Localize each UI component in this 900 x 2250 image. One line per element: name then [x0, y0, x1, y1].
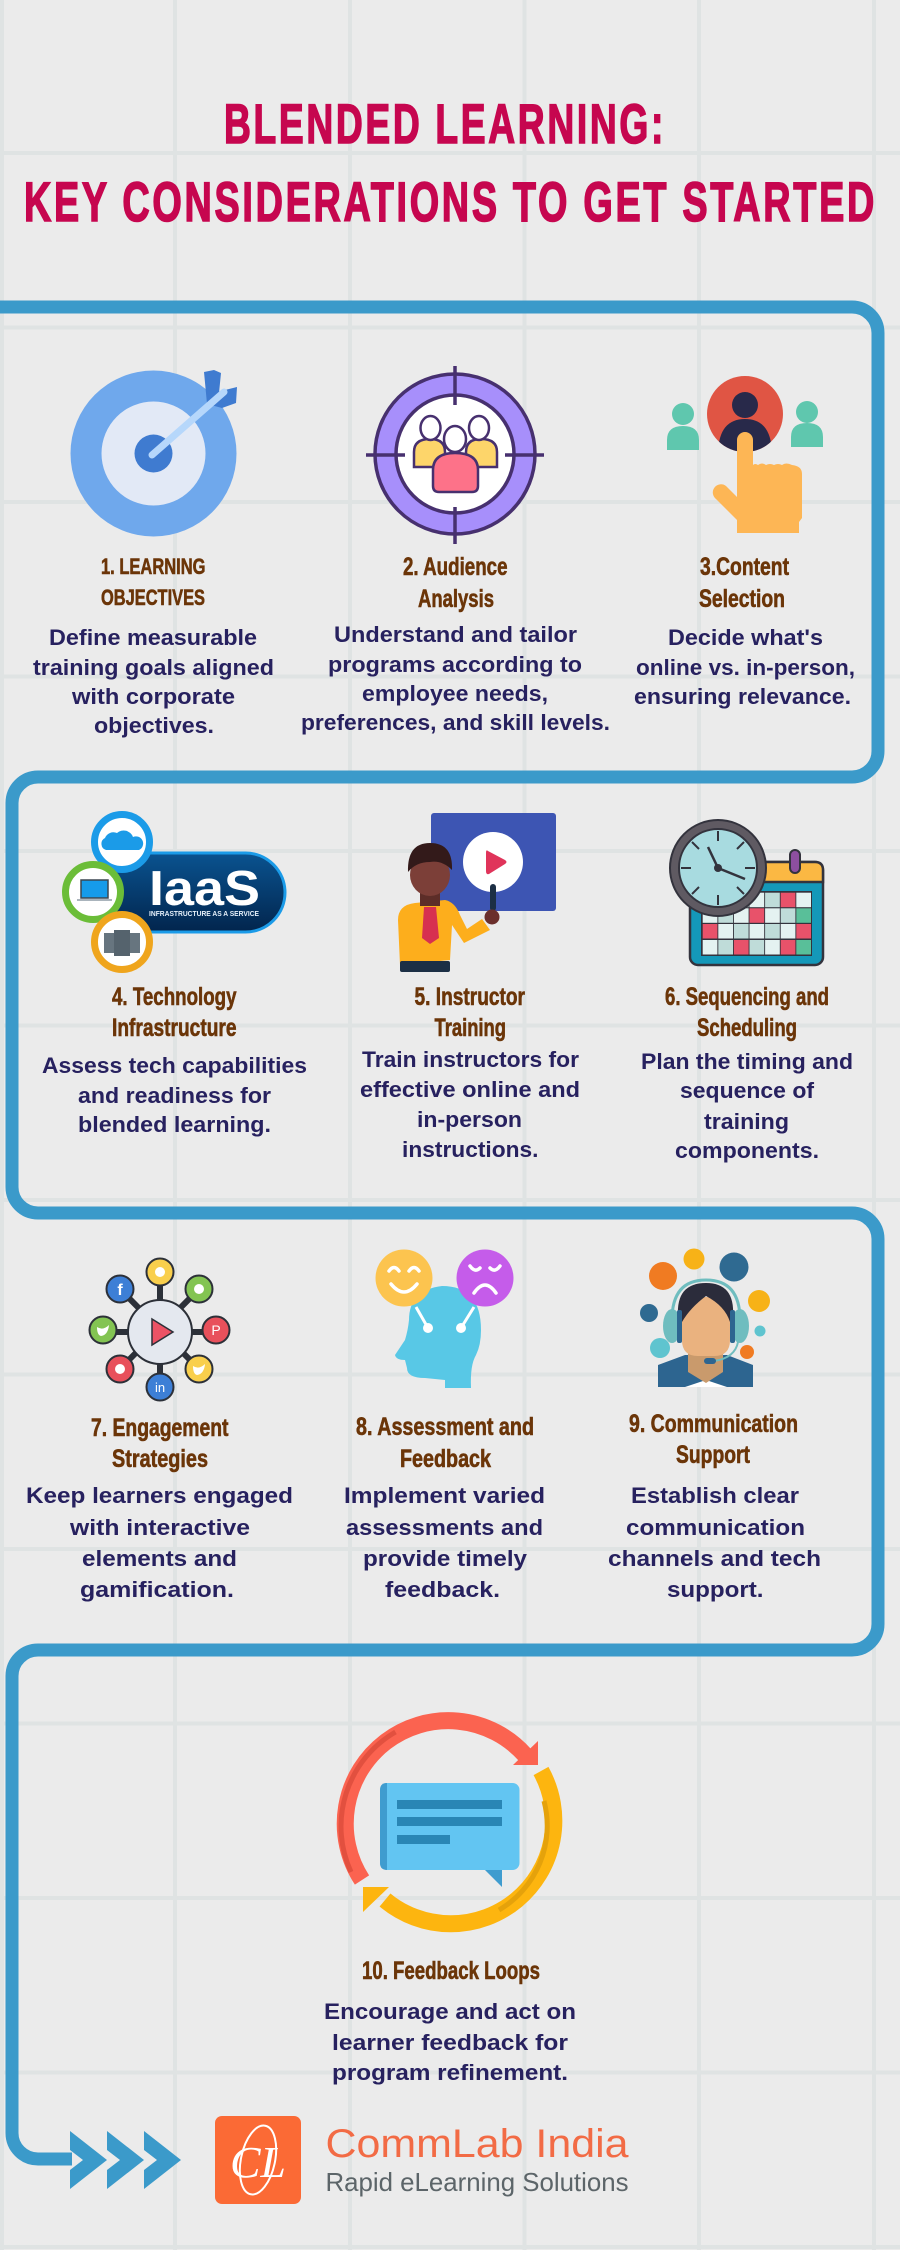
text: step 9 description: Establish clear	[631, 1483, 799, 1508]
icon: social media hub	[90, 1258, 230, 1400]
panel: step 4 technology infrastructure	[42, 814, 307, 1137]
heading: step 4: 4. Technology	[112, 983, 237, 1011]
panel: step 2 audience analysis	[301, 366, 610, 735]
text: step 7 description: gamification.	[80, 1577, 234, 1602]
panel: step 7 engagement strategies	[26, 1258, 293, 1602]
icon: target with dart	[70, 370, 237, 536]
text: step 8 description: provide timely	[363, 1546, 528, 1571]
icon: feedback cycle with speech bubble	[341, 1721, 554, 1924]
text: step 10 description	[324, 1999, 576, 2085]
text: step 1 description: objectives.	[94, 713, 214, 738]
heading: step 6: Scheduling	[697, 1014, 797, 1042]
text: step 1 description	[33, 625, 274, 738]
text: step 9 description	[608, 1483, 821, 1602]
icon: support agent with headset	[640, 1248, 770, 1387]
text: step 4 description: and readiness for	[78, 1083, 271, 1108]
text: step 9 description: support.	[667, 1577, 764, 1602]
heading: step 9: 9. Communication	[629, 1410, 798, 1438]
text: step 2 description: programs according to	[328, 652, 582, 677]
panel: step 5 instructor training	[360, 813, 580, 1162]
text: step 8 description: assessments and	[346, 1515, 543, 1540]
text: step 6 description: training	[704, 1109, 789, 1134]
text: step 5 description	[360, 1047, 580, 1162]
text: step 5 description: Train instructors for	[362, 1047, 579, 1072]
icon: IaaS badge	[66, 814, 285, 970]
icon: social media hub: f	[117, 1282, 123, 1299]
panel: step 10 feedback loops	[324, 1721, 576, 2085]
heading: step 1: OBJECTIVES	[101, 585, 205, 610]
icon: clock and calendar	[670, 820, 823, 965]
icon: hand selecting person	[667, 376, 823, 533]
heading: step 7: 7. Engagement	[91, 1414, 229, 1442]
text: step 3 description	[634, 625, 855, 709]
icon: audience in crosshair	[366, 366, 544, 544]
heading: step 3: 3.Content	[700, 553, 790, 581]
text: step 1 description: training goals aligned	[33, 655, 274, 680]
text: step 2 description	[301, 622, 610, 735]
heading: step 3: Selection	[699, 585, 785, 613]
text: step 10 description: learner feedback for	[332, 2030, 568, 2055]
heading: step 5: 5. Instructor	[414, 983, 525, 1011]
heading: step 4	[112, 983, 237, 1042]
icon: IaaS badge: IaaS	[149, 862, 260, 916]
heading: step 6: 6. Sequencing and	[665, 983, 829, 1011]
text: step 1 description: Define measurable	[49, 625, 257, 650]
arrow: chevrons pointing to logo	[70, 2131, 181, 2189]
heading: step 9	[629, 1410, 798, 1469]
text: step 6 description	[641, 1049, 853, 1163]
text: step 2 description: Understand and tailor	[334, 622, 577, 647]
text: step 4 description: blended learning.	[78, 1112, 271, 1137]
title	[24, 92, 877, 233]
text: step 5 description: effective online and	[360, 1077, 580, 1102]
icon: head with happy and sad faces	[376, 1250, 514, 1388]
text: step 6 description: sequence of	[680, 1078, 815, 1103]
title: BLENDED LEARNING:	[224, 92, 666, 155]
panel: step 1 learning objectives	[33, 370, 274, 738]
text: step 3 description: Decide what's	[668, 625, 823, 650]
heading: step 5: Training	[434, 1014, 506, 1042]
heading: step 3	[699, 553, 790, 613]
text: step 5 description: in-person	[417, 1107, 522, 1132]
text: step 8 description: Implement varied	[344, 1483, 545, 1508]
text: step 4 description	[42, 1053, 307, 1137]
icon: IaaS badge: INFRASTRUCTURE AS A SERVICE	[149, 911, 259, 918]
logo: CommLab India: CL	[230, 2138, 286, 2187]
text: step 3 description: online vs. in-person,	[636, 655, 855, 680]
icon: social media hub: P	[211, 1322, 221, 1338]
text: step 2 description: employee needs,	[362, 681, 548, 706]
icon: instructor presenting video	[398, 813, 556, 972]
text: step 5 description: instructions.	[402, 1137, 538, 1162]
text: step 6 description: components.	[675, 1138, 819, 1163]
text: step 7 description: with interactive	[69, 1515, 250, 1540]
text: step 1 description: with corporate	[71, 684, 235, 709]
text: step 10 description: program refinement.	[332, 2060, 568, 2085]
text: step 8 description	[344, 1483, 545, 1602]
heading: step 1	[101, 554, 206, 610]
heading: step 7	[91, 1414, 229, 1473]
heading: step 5	[414, 983, 525, 1042]
text: step 9 description: channels and tech	[608, 1546, 821, 1571]
logo: CommLab India	[215, 2116, 629, 2204]
heading: step 9: Support	[676, 1441, 751, 1469]
text: step 7 description: elements and	[82, 1546, 237, 1571]
heading: step 2: Analysis	[418, 585, 494, 613]
icon: social media hub: in	[155, 1380, 165, 1395]
heading: step 6	[665, 983, 829, 1042]
text: step 8 description: feedback.	[385, 1577, 500, 1602]
panel: step 3 content selection	[634, 376, 855, 709]
heading: step 8	[356, 1413, 534, 1473]
text: step 6 description: Plan the timing and	[641, 1049, 853, 1074]
heading: step 8: 8. Assessment and	[356, 1413, 534, 1441]
heading: step 4: Infrastructure	[112, 1014, 237, 1042]
text: step 2 description: preferences, and skill levels.	[301, 710, 610, 735]
heading: step 2: 2. Audience	[403, 553, 508, 581]
logo: CommLab India: Rapid eLearning Solutions	[326, 2167, 628, 2197]
heading: step 1: 1. LEARNING	[101, 554, 206, 579]
text: step 4 description: Assess tech capabilities	[42, 1053, 307, 1078]
panel: step 6 sequencing and scheduling	[641, 820, 853, 1163]
panel: step 8 assessment and feedback	[344, 1250, 545, 1602]
text: step 3 description: ensuring relevance.	[634, 684, 851, 709]
text: step 7 description	[26, 1483, 293, 1602]
heading: step 2	[403, 553, 508, 613]
heading: step 8: Feedback	[400, 1445, 491, 1473]
heading: step 7: Strategies	[112, 1445, 208, 1473]
logo: CommLab India: CommLab India	[326, 2122, 629, 2166]
text: step 9 description: communication	[626, 1515, 805, 1540]
panel: step 9 communication support	[608, 1248, 821, 1602]
text: step 7 description: Keep learners engaged	[26, 1483, 293, 1508]
text: step 10 description: Encourage and act on	[324, 1999, 576, 2024]
heading: step 10: 10. Feedback Loops	[362, 1957, 540, 1985]
